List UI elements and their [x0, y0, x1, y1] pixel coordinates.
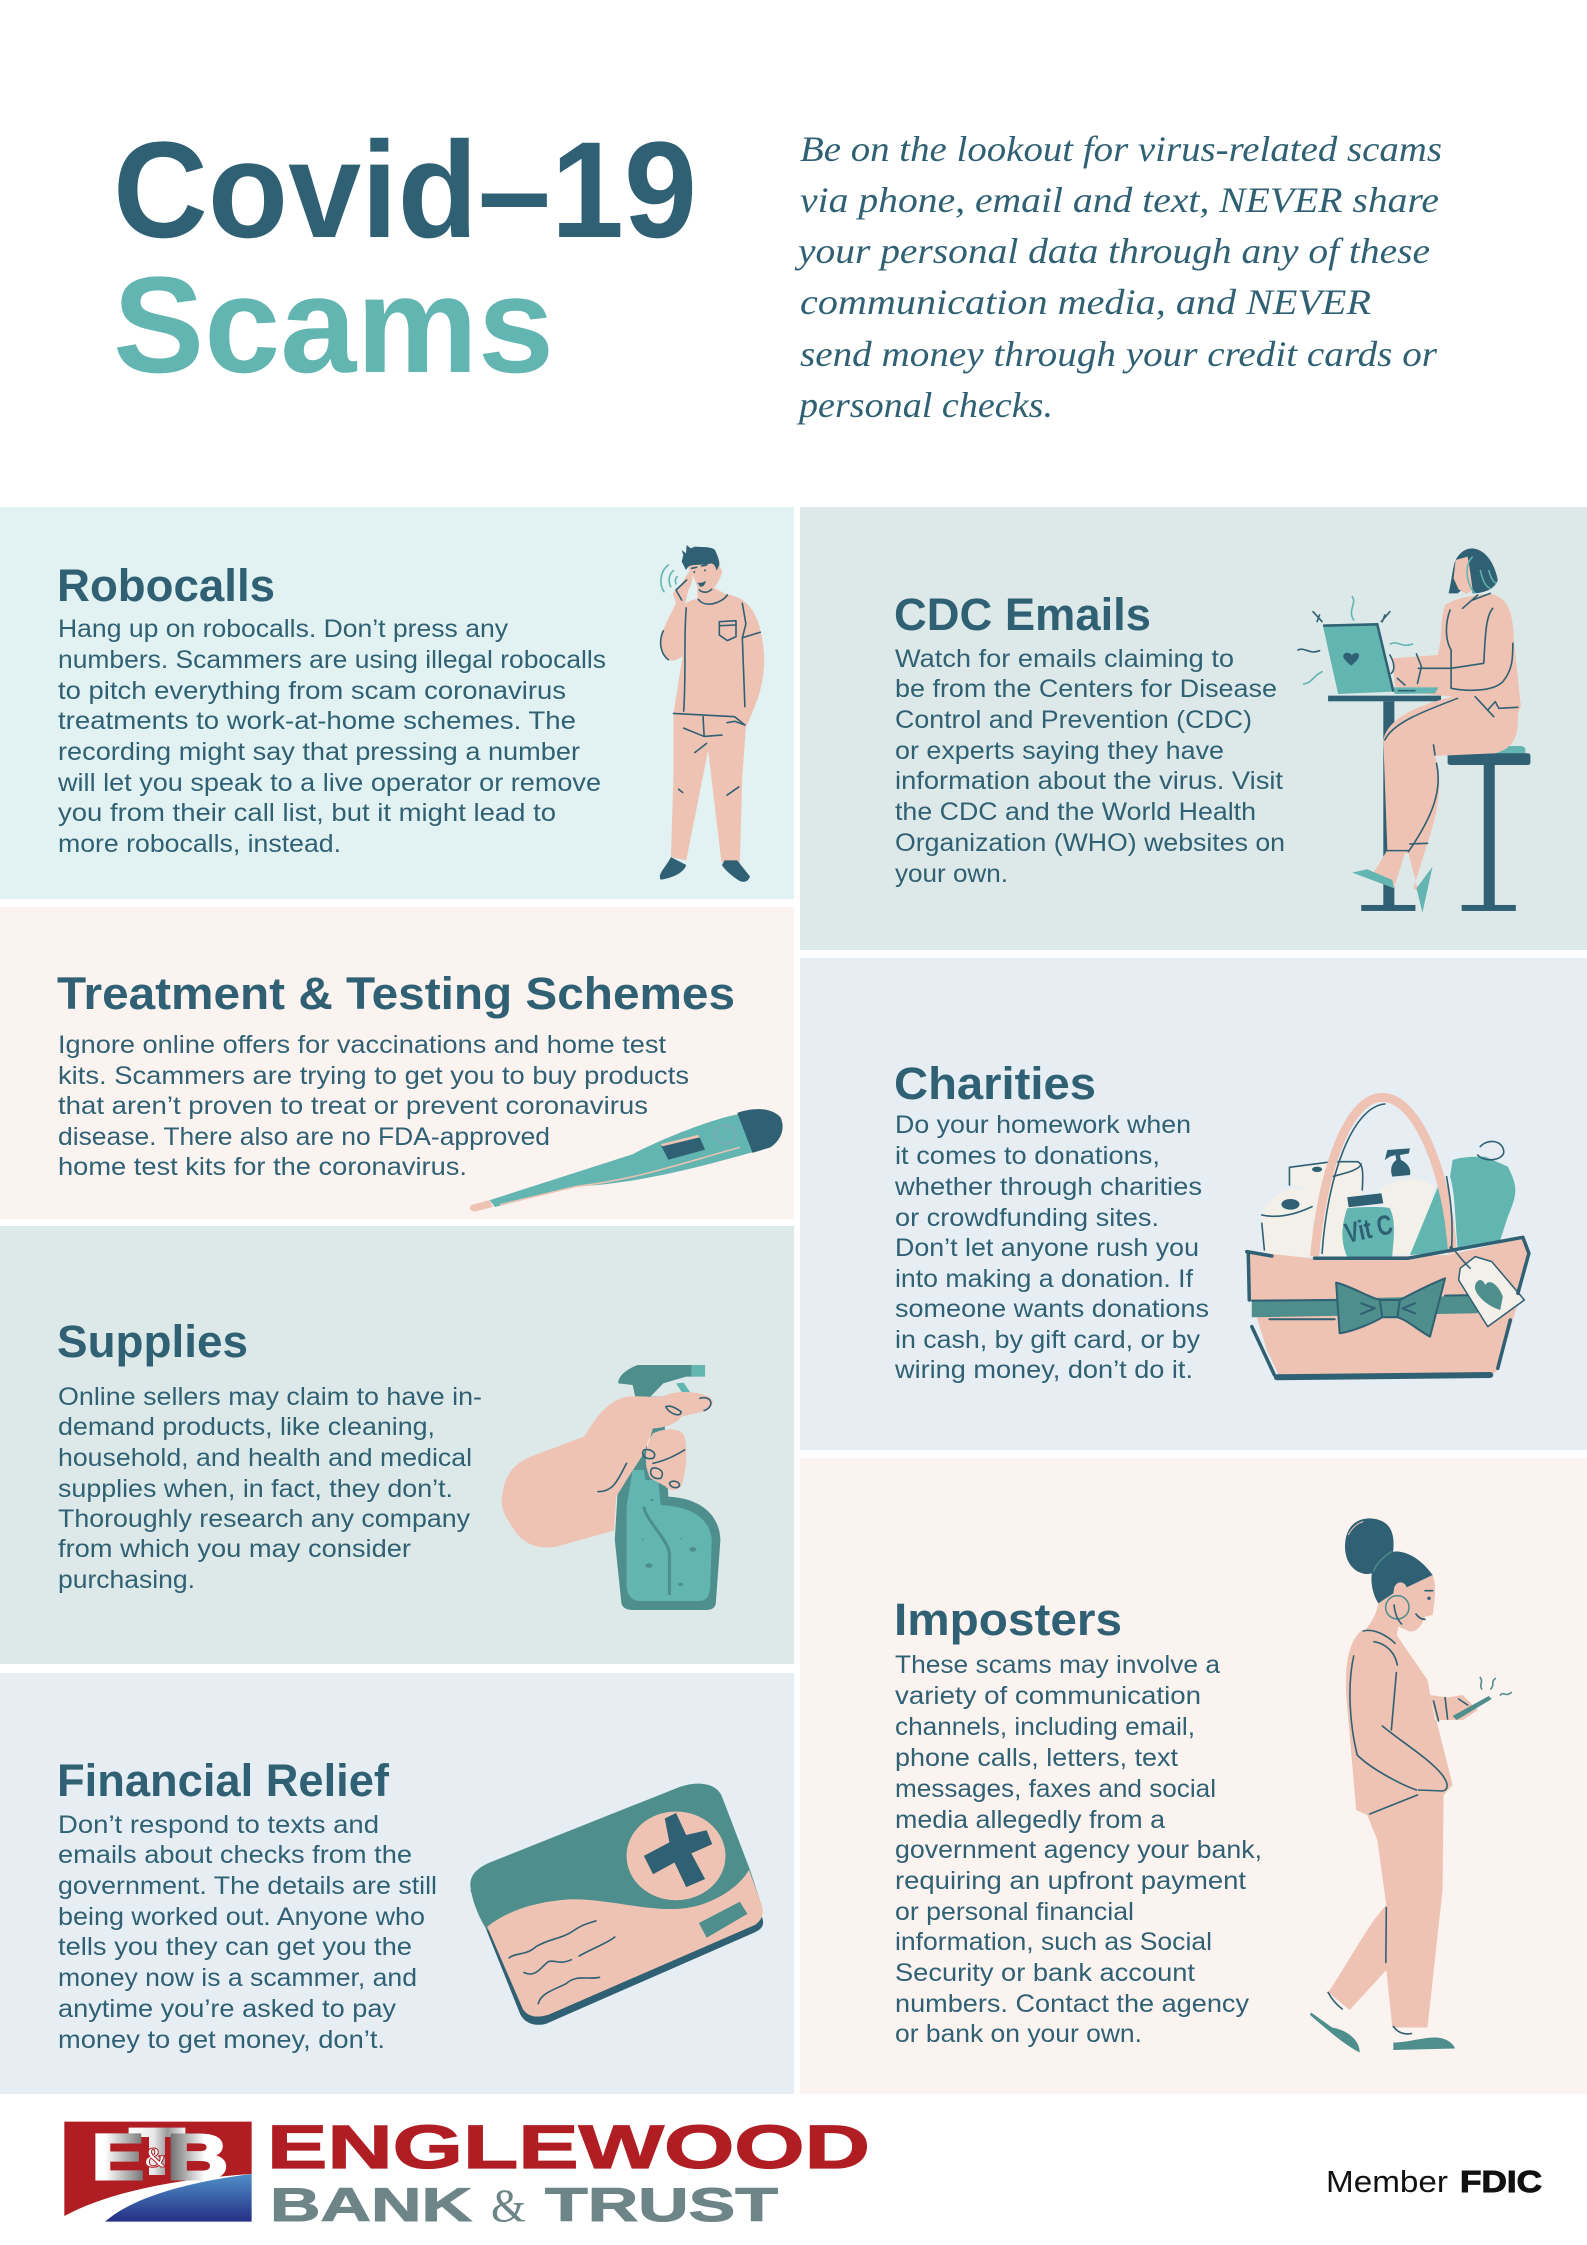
text: imposters body: requiring an upfront payment: [895, 1867, 1246, 1895]
text: financial relief body: Don’t respond to texts and: [58, 1811, 379, 1839]
heading: imposters: Imposters: [894, 1594, 1122, 1645]
text: charities body: into making a donation. If: [895, 1265, 1193, 1293]
panel: supplies: [0, 1226, 794, 1664]
text: financial relief body: being worked out. Anyone who: [58, 1903, 425, 1931]
text: financial relief body: anytime you’re asked to pay: [58, 1995, 397, 2023]
heading: charities: Charities: [894, 1058, 1096, 1109]
panel: cdc emails: [800, 507, 1587, 950]
text: treatment body: kits. Scammers are trying to get you to buy products: [58, 1062, 689, 1090]
logo wordmark: ENGLEWOOD: [267, 2113, 870, 2181]
text: robocalls body: [57, 615, 606, 858]
text: financial relief body: government. The details are still: [58, 1872, 437, 1900]
member fdic: Member: [1326, 2164, 1448, 2199]
text: cdc emails body: be from the Centers for Disease: [895, 675, 1277, 703]
text: charities body: it comes to donations,: [895, 1142, 1160, 1170]
intro text: [795, 129, 1442, 425]
heading: robocalls: Robocalls: [57, 560, 275, 611]
logo: englewood bank and trust: [64, 2113, 870, 2232]
logo mark: [64, 2114, 252, 2222]
text: treatment body: Ignore online offers for vaccinations and home test: [58, 1031, 666, 1059]
intro text: via phone, email and text, NEVER share: [800, 180, 1439, 220]
text: supplies body: [58, 1383, 482, 1594]
text: cdc emails body: Organization (WHO) websites on: [895, 829, 1285, 857]
panel: financial relief: [0, 1673, 794, 2094]
icon: woman walking with phone: [1310, 1518, 1511, 2052]
text: supplies body: Thoroughly research any company: [58, 1505, 471, 1533]
title: [113, 114, 697, 402]
logo mark: T: [129, 2114, 185, 2188]
text: cdc emails body: information about the virus. Visit: [895, 767, 1283, 795]
logo wordmark: [267, 2113, 870, 2232]
text: financial relief body: [58, 1811, 437, 2054]
text: imposters body: media allegedly from a: [895, 1806, 1165, 1834]
text: imposters body: [895, 1651, 1262, 2048]
text: robocalls body: numbers. Scammers are using illegal robocalls: [58, 646, 606, 674]
text: supplies body: supplies when, in fact, they don’t.: [58, 1475, 453, 1503]
icon: woman at laptop on stool: [1298, 548, 1530, 913]
icon: gift basket: [1247, 1097, 1529, 1377]
text: financial relief body: emails about checks from the: [58, 1841, 412, 1869]
text: financial relief body: money to get money, don’t.: [58, 2026, 385, 2054]
panel: imposters: [800, 1458, 1587, 2094]
text: robocalls body: treatments to work-at-home schemes. The: [58, 707, 576, 735]
text: supplies body: household, and health and medical: [58, 1444, 472, 1472]
text: robocalls body: recording might say that pressing a number: [58, 738, 580, 766]
text: cdc emails body: [895, 645, 1285, 888]
text: imposters body: government agency your bank,: [895, 1836, 1262, 1864]
text: imposters body: or bank on your own.: [895, 2020, 1142, 2048]
text: charities body: Don’t let anyone rush you: [895, 1234, 1199, 1262]
icon: gift basket: Vit C: [1342, 1209, 1395, 1249]
panel: charities: [800, 958, 1587, 1450]
text: cdc emails body: or experts saying they have: [895, 737, 1224, 765]
intro text: communication media, and NEVER: [800, 282, 1371, 322]
text: charities body: in cash, by gift card, or by: [895, 1326, 1201, 1354]
text: financial relief body: tells you they can get you the: [58, 1933, 412, 1961]
icon: man on phone: [660, 545, 764, 882]
text: charities body: Do your homework when: [895, 1111, 1191, 1139]
icon: thermometer: [470, 1109, 783, 1212]
logo wordmark: &: [491, 2180, 526, 2232]
intro text: Be on the lookout for virus-related scams: [800, 129, 1442, 169]
text: robocalls body: more robocalls, instead.: [58, 830, 341, 858]
logo wordmark: TRUST: [545, 2178, 778, 2231]
member fdic: FDIC: [1460, 2164, 1542, 2199]
logo mark: B: [167, 2121, 228, 2193]
intro text: your personal data through any of these: [795, 231, 1430, 271]
text: imposters body: channels, including email,: [895, 1713, 1195, 1741]
title: Covid–19: [113, 114, 697, 267]
panel: treatment and testing schemes: [0, 907, 794, 1219]
title: Scams: [113, 249, 554, 402]
icon: check card with cross: [470, 1784, 763, 2025]
text: treatment body: that aren’t proven to treat or prevent coronavirus: [58, 1092, 648, 1120]
text: imposters body: messages, faxes and social: [895, 1775, 1216, 1803]
text: imposters body: These scams may involve a: [895, 1651, 1220, 1679]
text: cdc emails body: Control and Prevention (CDC): [895, 706, 1252, 734]
text: supplies body: purchasing.: [58, 1566, 195, 1594]
text: charities body: [894, 1111, 1209, 1384]
heading: cdc emails: CDC Emails: [894, 589, 1151, 640]
heading: treatment and testing schemes: Treatment & Testing Schemes: [57, 968, 735, 1019]
text: supplies body: demand products, like cleaning,: [58, 1413, 435, 1441]
text: treatment body: disease. There also are no FDA-approved: [58, 1123, 550, 1151]
text: robocalls body: you from their call list, but it might lead to: [58, 799, 556, 827]
text: cdc emails body: your own.: [895, 860, 1008, 888]
icon: hand holding spray bottle: [502, 1365, 720, 1610]
text: imposters body: Security or bank account: [895, 1959, 1195, 1987]
text: imposters body: information, such as Social: [895, 1928, 1212, 1956]
text: robocalls body: to pitch everything from scam coronavirus: [58, 677, 566, 705]
text: cdc emails body: Watch for emails claiming to: [895, 645, 1234, 673]
intro text: personal checks.: [796, 385, 1053, 425]
text: robocalls body: Hang up on robocalls. Don’t press any: [58, 615, 509, 643]
text: treatment body: home test kits for the coronavirus.: [58, 1153, 467, 1181]
text: charities body: whether through charities: [894, 1173, 1202, 1201]
text: robocalls body: will let you speak to a live operator or remove: [57, 769, 601, 797]
text: charities body: wiring money, don’t do it.: [894, 1356, 1193, 1384]
text: treatment body: [58, 1031, 689, 1181]
member fdic: [1326, 2164, 1542, 2199]
text: supplies body: from which you may consider: [58, 1535, 411, 1563]
logo wordmark: BANK: [270, 2178, 472, 2231]
logo mark: E: [92, 2121, 144, 2193]
text: imposters body: or personal financial: [895, 1898, 1134, 1926]
text: financial relief body: money now is a scammer, and: [58, 1964, 417, 1992]
text: charities body: or crowdfunding sites.: [895, 1204, 1159, 1232]
text: charities body: someone wants donations: [895, 1295, 1209, 1323]
text: imposters body: phone calls, letters, text: [895, 1744, 1178, 1772]
text: imposters body: numbers. Contact the agency: [895, 1990, 1250, 2018]
intro text: send money through your credit cards or: [800, 334, 1438, 374]
text: cdc emails body: the CDC and the World Health: [895, 798, 1256, 826]
text: imposters body: variety of communication: [895, 1682, 1201, 1710]
logo mark: &: [144, 2143, 167, 2174]
panel: robocalls: [0, 507, 794, 899]
heading: financial relief: Financial Relief: [57, 1755, 390, 1806]
heading: supplies: Supplies: [57, 1316, 248, 1367]
text: supplies body: Online sellers may claim to have in-: [58, 1383, 482, 1411]
